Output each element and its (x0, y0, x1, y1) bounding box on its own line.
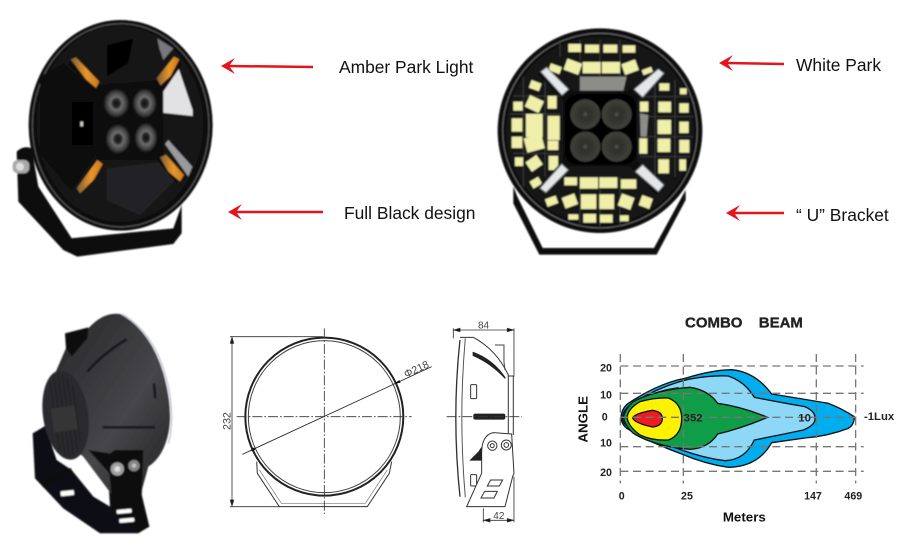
bracket: lamp 2 (513, 187, 686, 255)
chart title: COMBO BEAM (685, 315, 803, 332)
cable (42, 470, 72, 485)
lamp body: lamp 1 (29, 20, 213, 231)
lamp body: lamp 2 (498, 28, 702, 233)
lamp circle (245, 338, 403, 496)
dimension 84 (453, 320, 514, 377)
rear cover disc (37, 367, 94, 463)
side plate (88, 450, 149, 532)
contour values: -1Lux (864, 411, 895, 423)
photo: rear view of lamp (33, 314, 172, 533)
x axis labels: 0 (619, 491, 625, 503)
X frame: lamp 2 (538, 68, 665, 195)
lens rim sliver (122, 314, 172, 443)
technical drawing: side view with dimensions (447, 320, 522, 522)
x axis labels: 25 (681, 491, 693, 503)
bracket slots (60, 490, 134, 523)
side center line (447, 415, 522, 418)
peak contour (633, 410, 662, 427)
arrow: to white park (719, 55, 784, 71)
y axis labels: 10 (600, 389, 612, 401)
x axis title: Meters (723, 509, 766, 524)
LED tile reflections: lamp 2 (512, 44, 689, 223)
photo: amber park light lamp, front three-quarter view (13, 20, 213, 257)
y axis labels: 20 (600, 362, 612, 374)
height dimension and label (221, 337, 323, 507)
label: U bracket: “ U” Bracket (796, 205, 889, 225)
contour values: 10 (798, 412, 811, 424)
top adjuster (65, 327, 88, 357)
label: full black design: Full Black design (344, 203, 475, 223)
contour values: 352 (684, 413, 703, 425)
faint contour (624, 387, 680, 447)
x axis labels: 469 (844, 491, 862, 503)
white park lights: lamp 2 (540, 67, 664, 193)
y axis labels: 10 (600, 437, 612, 449)
1 lux contour (621, 370, 854, 467)
rear ribs (87, 339, 155, 427)
side vents (471, 385, 477, 486)
bracket outline (257, 462, 392, 507)
bracket: lamp 1 (17, 147, 182, 257)
chrome reflections: lamp 2 (580, 77, 648, 137)
lens: lamp 1 (37, 26, 203, 222)
chart: combo beam pattern (575, 315, 895, 524)
dimension 42 (483, 477, 514, 522)
side bracket (467, 433, 514, 507)
label: white park: White Park (796, 55, 881, 75)
side body outline (456, 337, 513, 497)
arrow: to amber park light (221, 58, 313, 74)
arrow: to full black design (228, 204, 323, 220)
dimension 84: 84 (478, 320, 490, 331)
label: amber park light: Amber Park Light (339, 57, 474, 77)
high intensity contour (627, 398, 682, 440)
photo: white park lamp, front view lit (498, 28, 702, 255)
y axis labels (600, 362, 612, 479)
x axis labels (619, 491, 862, 503)
center LED module: lamp 2 (565, 94, 636, 165)
dimension 42: 42 (493, 511, 505, 522)
center LED module: lamp 1 (98, 83, 162, 158)
rear housing (45, 314, 170, 497)
diameter line and label (242, 359, 432, 454)
amber park lights: lamp 1 (71, 57, 184, 193)
10 lux contour (622, 376, 815, 461)
y axis labels: 20 (600, 467, 612, 479)
bolt: lamp 1 (13, 160, 29, 173)
grid (620, 354, 864, 483)
X frame: lamp 1 (68, 57, 183, 195)
diameter line and label: Φ218 (402, 359, 431, 381)
x axis labels: 147 (804, 491, 822, 503)
rear bracket (33, 426, 149, 533)
height dimension and label: 232 (221, 412, 233, 430)
bolts (111, 460, 140, 476)
contour values (684, 411, 895, 425)
center lines (237, 328, 412, 514)
grid lines: lamp 2 (510, 40, 693, 227)
side rib (473, 353, 505, 378)
y axis title: ANGLE (575, 396, 590, 443)
352 lux contour (624, 387, 768, 449)
y axis labels: 0 (602, 412, 608, 424)
technical drawing: front view with dimensions (221, 328, 432, 514)
arrow: to U bracket (726, 205, 784, 221)
